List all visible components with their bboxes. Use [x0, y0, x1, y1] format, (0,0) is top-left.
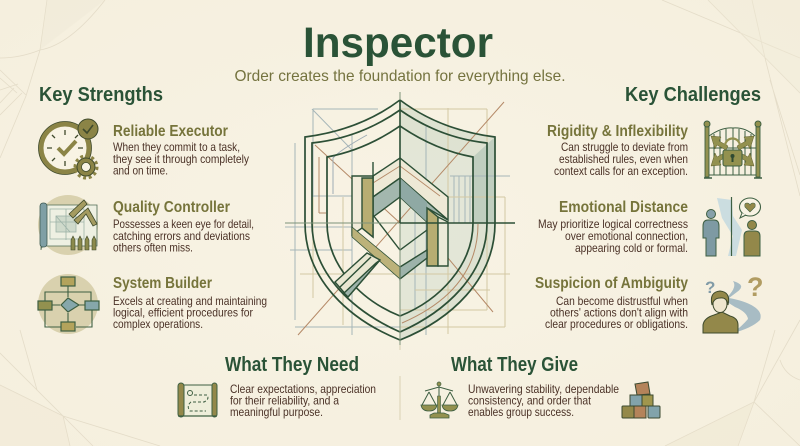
- item: quality controller: catching errors and deviations: [113, 230, 250, 243]
- item: quality controller: Quality Controller: [113, 199, 230, 216]
- icon: stacked blocks: [622, 382, 660, 418]
- item: system builder: System Builder: [113, 275, 212, 292]
- heading: what they need: What They Need: [225, 353, 359, 376]
- item: quality controller: others often miss.: [113, 242, 193, 254]
- item: rigidity and inflexibility: [547, 123, 688, 178]
- item: emotional distance: Emotional Distance: [559, 199, 688, 216]
- shield shaded right half: [400, 100, 495, 340]
- item: emotional distance: over emotional connection,: [565, 230, 688, 243]
- item: reliable executor: they see it through completely: [113, 153, 249, 166]
- item: emotional distance: [538, 199, 688, 255]
- shield outlines: [305, 100, 495, 340]
- item: rigidity and inflexibility: established rules, even when: [559, 153, 688, 166]
- heading: key strengths: Key Strengths: [39, 83, 163, 106]
- text: what they give: Unwavering stability, dependable: [468, 383, 619, 396]
- subtitle: Order creates the foundation for everything else.: [234, 68, 566, 85]
- item: suspicion of ambiguity: clear procedures or obligations.: [545, 318, 688, 331]
- item: system builder: logical, efficient procedures for: [113, 306, 253, 320]
- item: system builder: complex operations.: [113, 318, 203, 331]
- icon: clock with check and gear: [38, 119, 98, 178]
- panel: key challenges: [535, 83, 764, 333]
- item: system builder: Excels at creating and maintaining: [113, 295, 267, 308]
- text: what they give: [468, 383, 619, 419]
- icon: map scroll: [178, 383, 217, 417]
- text: what they give: consistency, and order that: [468, 394, 592, 408]
- item: reliable executor: Reliable Executor: [113, 123, 228, 140]
- item: reliable executor: and on time.: [113, 164, 168, 178]
- central hexagon mark: [335, 158, 448, 297]
- item: rigidity and inflexibility: Can struggle to deviate from: [561, 141, 688, 154]
- item: reliable executor: [113, 123, 249, 178]
- item: emotional distance: May prioritize logical correctness: [538, 218, 688, 231]
- item: quality controller: [113, 199, 254, 254]
- icon: balance scales: [421, 382, 458, 418]
- icon: person and winding path with question marks: ?: [747, 272, 764, 302]
- icon: flowchart: [38, 274, 99, 334]
- item: suspicion of ambiguity: others' actions don't align with: [550, 306, 688, 320]
- item: suspicion of ambiguity: [535, 275, 688, 331]
- heading: what they give: What They Give: [451, 353, 578, 376]
- icon: person and winding path with question marks: ?: [705, 278, 715, 297]
- title: Inspector: [303, 19, 493, 67]
- icon: locked gate: [704, 121, 762, 178]
- text: what they need: meaningful purpose.: [230, 406, 323, 419]
- item: quality controller: Possesses a keen eye for detail,: [113, 218, 254, 231]
- central shield blueprint: [285, 92, 515, 350]
- item: reliable executor: When they commit to a task,: [113, 141, 240, 154]
- text: what they need: [230, 383, 376, 419]
- panel: key strengths: [38, 83, 267, 334]
- shield axes: [285, 92, 400, 350]
- item: system builder: [113, 275, 267, 331]
- panel: what they give: [421, 353, 660, 419]
- panel: what they need: [178, 353, 376, 419]
- icon: two people separated by ice: [703, 197, 760, 256]
- text: what they give: enables group success.: [468, 406, 574, 419]
- item: suspicion of ambiguity: Suspicion of Ambiguity: [535, 275, 688, 292]
- icon: blueprint with calipers and pencils: [38, 195, 98, 255]
- icon: person and winding path with question marks: [703, 272, 764, 333]
- item: rigidity and inflexibility: context calls for an exception.: [554, 165, 688, 178]
- text: what they need: for their reliability, and a: [230, 394, 339, 408]
- heading: key challenges: Key Challenges: [625, 83, 761, 106]
- item: suspicion of ambiguity: Can become distrustful when: [556, 295, 688, 308]
- text: what they need: Clear expectations, appreciation: [230, 383, 376, 396]
- item: rigidity and inflexibility: Rigidity & Inflexibility: [547, 123, 688, 140]
- blueprint grid lines: [285, 102, 510, 335]
- item: emotional distance: appearing cold or formal.: [575, 242, 688, 255]
